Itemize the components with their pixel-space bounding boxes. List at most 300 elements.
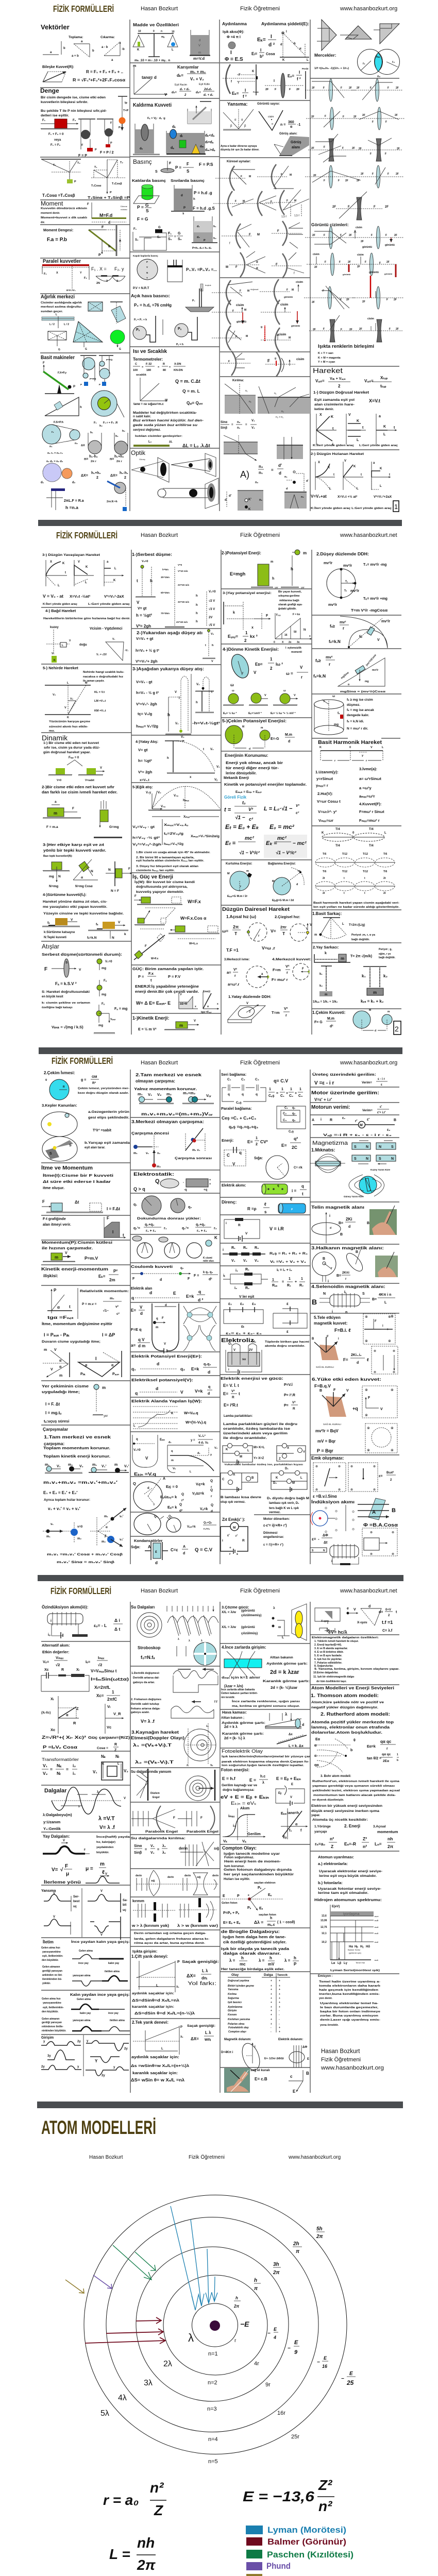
panel: özindüksiyon ve alternatif akım: Xc=	[96, 1693, 104, 1698]
panel: enerjinin korunumu: Enerji yok olmaz, ancak bir	[226, 761, 283, 765]
panel: lamba devreleri: C	[222, 1478, 225, 1481]
panel: yatay ve eğik atış: V₀	[158, 791, 161, 794]
panel: elektrostatik: nötr olur.	[203, 1260, 214, 1263]
panel: çarpışmalar: α	[106, 1526, 108, 1529]
panel: emk oluşması: Δt	[324, 1541, 328, 1545]
table: olay dalga tanecik: +	[279, 2026, 280, 2029]
panel: basit makineler: F.X=P.y	[58, 371, 66, 375]
panel: basit makineler: h₂-h₁	[120, 471, 128, 475]
panel: vektörler: a	[81, 40, 83, 43]
panel: girişim: y	[113, 2066, 115, 2069]
panel: kondansatör bağlama: Cₑş	[268, 1094, 275, 1098]
table: olay dalga tanecik: Işık basıncı	[228, 2001, 242, 2004]
panel: magnetik ve elektrik dolanım: E	[293, 2089, 296, 2094]
panel: basınç: F₁	[133, 228, 137, 231]
panel: enerjinin korunumu: Kinetik ve potansiyel enerjiler toplamıdır.	[224, 783, 307, 787]
panel: küresel aynalar: görüntü	[284, 296, 293, 298]
panel: atom modelleri ve enerji seviyeleri: Eₙ=-R	[344, 1841, 356, 1846]
panel: emk oluşması: Bωℓ²	[386, 1471, 394, 1475]
panel: düşey atışlar: 2-)Yukarıdan aşağı düşey atı	[137, 631, 203, 635]
panel: moment: F	[102, 226, 104, 229]
formula: enerji: Z²	[318, 2477, 332, 2493]
panel: madde ve özellikleri	[133, 22, 210, 62]
panel: fotoelektrik olay: i₀	[233, 1823, 235, 1828]
panel: aydınlanma: I	[271, 34, 272, 40]
panel: karışımlar: d₁ + d₂	[180, 88, 190, 91]
panel: coulomb ve elektrik alan: Vₛ L²	[198, 1434, 206, 1438]
panel: hareket: Vᵢₗₖ + Vₛₒₙ	[330, 377, 346, 381]
panel: küre elektrik alan ve potansiyel: Q₁+Q₂	[204, 1521, 212, 1524]
panel: ince zarlarda girişim: Aydınlık görme şartı:	[266, 1662, 308, 1666]
panel: ağırlık merkezi: G	[58, 348, 60, 351]
panel: viraj: mv²	[326, 655, 333, 659]
panel: düşey atışlar: V	[175, 691, 177, 694]
panel: viraj: r	[329, 662, 331, 667]
panel: atom modelleri ve enerji seviyeleri: şeklindeki tezini, elektron ışıma yapmadan açısal	[312, 1789, 400, 1792]
panel: düzgün dairesel hareket: F=m	[273, 968, 281, 972]
panel: su dalgalarında yansıma: Parabolik Engel	[187, 1830, 218, 1834]
panel: çarpışmalar: m₁	[104, 1515, 108, 1518]
panel: yansıma ve iletim: yansıyan atma	[73, 2019, 91, 2022]
panel: ısı ve sıcaklık: X-DN	[174, 363, 181, 366]
panel: itme ve momentum: Pᵢₗₖ	[80, 1372, 86, 1376]
panel: yatay ve eğik atış: hₘₐₓ=V₀ᵧ²/2g	[164, 842, 183, 846]
page 1 header: Hasan Bozkurt	[141, 6, 178, 12]
panel: düşey düzlemde ddh: mv²/r	[324, 562, 332, 565]
panel: aydınlanma: I	[286, 30, 287, 33]
panel: yay dalgaları	[43, 1834, 130, 1885]
panel: compton olayı: P=Pₛ + Pₑ	[223, 1911, 240, 1915]
panel: elektrostatik: +	[209, 1179, 211, 1182]
panel: atom modelleri ve enerji seviyeleri: b	[397, 1759, 398, 1762]
panel: lamba devreleri: D₂	[273, 1482, 277, 1485]
panel: aydınlanma: f ²	[243, 94, 247, 99]
orbit labels: n=3	[207, 2406, 217, 2412]
orbit labels: r	[234, 2338, 237, 2344]
panel: basit makineler: h₁	[115, 435, 119, 438]
panel: magnetik kuvvet: magnetik kuvvet:	[314, 1321, 347, 1326]
panel: kondansatör bağlama: C₂	[289, 1094, 293, 1098]
panel: su dalgaları: Etmesi(Doppler Olayı)	[131, 1736, 184, 1740]
panel: elektroliz: ile doğru orantılıdır.	[223, 1437, 267, 1440]
panel: emisyon: yon denir.	[319, 1997, 332, 2000]
panel: karışımlar: tanα= d	[142, 75, 157, 80]
panel: ısı ve sıcaklık: L₀	[148, 440, 152, 444]
panel: emisyon: tomda elektronların daha kararlı	[319, 1985, 381, 1988]
panel: mercekler: F	[385, 152, 386, 156]
panel: madde ve özellikleri: 10	[172, 30, 175, 33]
panel: hareket: K	[353, 465, 356, 468]
orbit labels: 4r	[254, 2361, 259, 2367]
panel: fotoelektrik olay: Akım	[240, 1806, 250, 1810]
panel: coulomb ve elektrik alan: V=k	[195, 1388, 203, 1394]
panel: düzgün dairesel hareket: V	[246, 1002, 248, 1005]
panel: hareket: V=V₀+at	[311, 494, 327, 499]
panel: atışlar	[42, 943, 127, 1034]
panel: çözme gücü: çözülmemiş)	[241, 1614, 261, 1617]
panel: coulomb ve elektrik alan: Coulomb kuvveti	[131, 1264, 173, 1269]
panel: çekim ivmesi ve kepler: g =	[81, 1078, 86, 1082]
panel: kırılma: V₂	[251, 427, 255, 430]
panel: küre elektrik alan ve potansiyel: Vₐ=k	[200, 1507, 208, 1511]
panel: fotoelektrik olay: E = h.f	[222, 1776, 235, 1781]
panel: çekim ivmesi ve kepler: T²/r³ =sabit	[93, 1129, 112, 1132]
panel: özindüksiyon ve alternatif akım: Vₗ	[107, 1704, 111, 1709]
panel: iş güç enerji: W= Δ E= Eₛₒₙ- E	[136, 1001, 171, 1006]
panel: coulomb ve elektrik alan: K	[171, 1412, 174, 1415]
panel: su dalgaları: λ₁	[187, 1764, 189, 1767]
panel: ışıkta girişim: Işıkta girişim:	[132, 1949, 157, 1954]
panel: lamba devreleri: M	[292, 1482, 295, 1485]
panel: kırılma: K′	[248, 498, 251, 501]
panel: fotoelektrik olay: parak elektron koparma olayına denir.Çarpan fo-	[222, 1760, 309, 1764]
panel: coulomb ve elektrik alan: q	[135, 1391, 138, 1396]
panel: çarpışmalar: Çarpışmalar	[43, 1427, 69, 1432]
panel: kondansatör bağlama: C₁	[227, 1078, 231, 1081]
chart: hidrojen enerji seviyeleri: Lyman Serisi(morötesi ışık)	[330, 1969, 380, 1972]
panel: düzgün dairesel hareket: 1.Açısal hız (ω)	[226, 914, 256, 919]
panel: potansiyel enerji: yer	[275, 586, 278, 589]
panel: coulomb ve elektrik alan: y =	[191, 1439, 195, 1442]
panel: hava kaması	[221, 1710, 307, 1748]
panel: fotoelektrik olay: Işık taneciklerinin(fotonların)metal bir yüzeye çar	[222, 1755, 311, 1758]
panel: de broglie: mV	[268, 1962, 275, 1967]
panel: yansıma ve iletim: eşit, iletileninkin-	[42, 1955, 63, 1958]
panel: iş güç enerji: W=F.x.Cos α	[180, 916, 207, 921]
panel: görüntü çizimleri: görüntü	[362, 246, 372, 249]
panel: kondansatör bağlama: q	[256, 1093, 258, 1096]
panel: ışıkta girişim: P	[180, 2026, 182, 2029]
panel: kırılma: n₂	[259, 464, 263, 469]
orbit labels: −E	[240, 2320, 249, 2328]
table: olay dalga tanecik: Birbiri içinden geçme	[228, 1985, 254, 1988]
panel: fotoelektrik olay: E	[291, 1783, 293, 1786]
panel: x ışını ve elektromagnetik dalgalar: t	[396, 1611, 397, 1614]
panel: devreler: R₁	[245, 1268, 249, 1272]
panel: basınç: S₁	[135, 239, 139, 242]
panel: paralel kuvvetler: R=F₁+F₂	[66, 289, 76, 292]
panel: mercekler: 1/f =(nₘ/n₀ -1)(1/r₁ + 1/r₂)	[314, 67, 349, 70]
panel: enerjinin korunumu: m	[298, 870, 300, 873]
panel: kondansatör bağlama: C₃	[255, 1078, 259, 1081]
panel: atom modelleri ve enerji seviyeleri: lanmış, elektronlar onun etrafında	[311, 1725, 390, 1730]
panel: emk oluşması: ⊗	[338, 1465, 341, 1468]
orbit labels: −	[317, 2360, 320, 2365]
panel: atom modelleri ve enerji seviyeleri: 3. Bohr atom modeli:	[321, 1775, 351, 1778]
panel: mercekler: F	[324, 146, 325, 149]
table: olay dalga tanecik: Girişim	[228, 2009, 237, 2012]
panel: devreler: Vₜ =V₁ + V₂ + V₃	[270, 1261, 306, 1264]
panel: emk oluşması: ⊙	[335, 1518, 338, 1521]
panel: küre elektrik alan ve potansiyel: Q	[181, 1493, 184, 1496]
panel: hareket: L:Geri yönde giden araç	[359, 444, 398, 447]
panel: ağırlık merkezi: Cisimler asıldığında ağırlık	[41, 301, 82, 304]
panel: özindüksiyon ve alternatif akım	[41, 1605, 130, 1752]
table: olay dalga tanecik: Aydınlanma	[227, 2006, 243, 2009]
orbit labels: 2λ	[163, 2360, 172, 2368]
panel: atışlar: V	[79, 968, 81, 972]
panel: basit makineler: h₁+h₂	[114, 455, 124, 459]
panel: coulomb ve elektrik alan: F =	[194, 1274, 199, 1278]
panel: kondansatör bağlama: q	[301, 1184, 304, 1189]
panel: görüntü çizimleri: Y + M = cyan	[318, 361, 335, 364]
panel: düşey atışlar: V	[211, 660, 213, 663]
panel: basınç: Pₓ = h	[176, 343, 183, 346]
panel: özindüksiyon ve alternatif akım: Alternatif akım:	[42, 1643, 70, 1648]
panel: küre elektrik alan ve potansiyel: Q₁	[154, 1515, 158, 1518]
panel: itme ve momentum: Δt süre etki ederse I kadar	[43, 1179, 111, 1184]
panel: iş güç enerji: GÜÇ: Birim zamanda yapılan iştir.	[132, 967, 204, 971]
panel: atom modelleri ve enerji seviyeleri: 2π	[388, 1844, 394, 1849]
panel: mercekler	[305, 49, 405, 220]
panel: düzgün dairesel hareket: V=ω .r	[262, 945, 276, 951]
panel: coulomb ve elektrik alan: q₂	[180, 1267, 184, 1270]
panel: kondansatör bağlama: q= C.V	[274, 1078, 288, 1083]
panel: ısı ve sıcaklık: Buz erirken hacmi küçülür. Isıl den-	[133, 419, 204, 422]
panel: yatay ve eğik atış: x=V₀.t	[140, 778, 149, 782]
panel: enerjinin korunumu: √1 − V²/c²	[276, 850, 297, 855]
panel: üreteç ve motor: ε - i r	[378, 1078, 385, 1081]
panel: görüntü çizimleri: F	[365, 261, 366, 264]
panel: basit makineler: F.S=P.h	[54, 421, 64, 424]
panel: düşey düzlemde ddh: T₀= mv²/r -mg	[363, 563, 386, 567]
panel: kaldırma kuvveti: Fₖ = Vᵦ · dₛ ·g	[147, 117, 165, 120]
panel: atom modelleri ve enerji seviyeleri: r	[386, 1747, 388, 1751]
panel: basit makineler: n=	[84, 457, 88, 461]
panel: serbest düşme: 1-)Serbest düşme:	[132, 552, 172, 557]
panel: lamba devreleri: D₁	[285, 1467, 289, 1470]
panel: özindüksiyon ve alternatif akım: 2πfC	[107, 1697, 117, 1702]
panel: de broglie: h	[269, 1956, 272, 1960]
panel: yansıma: Görüntü sayısı:	[257, 103, 280, 106]
panel: coulomb ve elektrik alan: q	[171, 1450, 173, 1453]
panel: su dalgalarında yansıma: Su dalgalarında yansım	[131, 1770, 171, 1774]
panel: çekim potansiyel enerjisi: d	[249, 748, 250, 751]
panel: hareket: V	[348, 413, 351, 417]
panel: iş güç enerji: 1-)Kinetik Enerji:	[132, 1015, 170, 1021]
panel: potansiyel enerji: E=mgh	[230, 571, 245, 577]
panel: üreteç ve motor: B	[394, 1118, 396, 1122]
panel: düşey atışlar: h	[196, 701, 198, 704]
panel: aydınlanma: I	[274, 79, 275, 83]
panel: ince zarlarda girişim: Alttan bakanın	[270, 1656, 293, 1659]
panel: magnetik kuvvet: ⊗	[367, 1427, 370, 1430]
panel: devreler: V₃	[255, 1259, 259, 1263]
panel: de broglie: dalga olarak davranır.	[223, 1952, 281, 1956]
panel: devreler: V	[245, 1232, 248, 1235]
panel: hareket: 2-) Düzgün Hızlanan Hareket	[311, 452, 364, 456]
panel: mercekler: F	[323, 87, 325, 90]
panel: düşey atışlar: V₀	[211, 633, 214, 636]
panel: görüntü çizimleri: görüntü	[369, 271, 379, 274]
panel: girişim: 2y	[77, 2040, 81, 2043]
panel: su dalgalarında kırılma: Derin ortamdan sığ ortama geçen dalga-	[134, 1932, 206, 1935]
panel: su dalgaları: f f	[214, 1701, 218, 1704]
panel: basit sarkaç: m	[341, 956, 344, 961]
panel: potansiyel enerji: miktarına bağlı	[279, 599, 299, 602]
orbit labels: 16	[322, 2364, 328, 2369]
panel: küresel aynalar: M	[294, 199, 296, 202]
panel: özindüksiyon ve alternatif akım: (Xₗ-Xc)	[41, 1711, 50, 1715]
panel: mercekler: 2F	[397, 147, 400, 150]
panel: magnetik kuvvet: ⊗	[365, 1388, 368, 1392]
panel: compton olayı: mₑ.c	[267, 1923, 275, 1927]
divider bar 5	[37, 2102, 403, 2108]
panel: serbest düşme: 7h=35m	[161, 612, 170, 615]
panel: elektroliz: Lamba parlaklıkları güçleri ile doğru	[223, 1423, 297, 1426]
panel: yansıma: düşmüş bir ışın 2α kadar döner.	[221, 148, 260, 151]
panel: magnetik kuvvet: B	[312, 1337, 314, 1341]
panel: kondansatör bağlama: q₂	[292, 1112, 296, 1115]
panel: su dalgaları: Derinlik artarsa dal-	[133, 1676, 160, 1680]
panel: su dalgaları: 1.Derinlik değişmesi:	[131, 1672, 160, 1675]
panel: görüntü çizimleri: cisim	[367, 317, 374, 320]
panel: küre elektrik alan ve potansiyel: d²	[179, 1509, 183, 1513]
panel: basit harmonik hareket: T/12	[342, 870, 347, 873]
orbit labels: π	[254, 2286, 258, 2292]
panel: kondansatör bağlama: C₂	[241, 1078, 245, 1081]
panel: viraj: fₛ=k.N	[329, 639, 341, 644]
panel: emisyon: yona örnektir.	[320, 2024, 339, 2027]
panel: aydınlanma: Cosα	[266, 53, 275, 56]
panel: magnetik kuvvet: B	[319, 1389, 322, 1393]
panel: emk oluşması: A	[372, 1510, 376, 1515]
panel: magnetik kuvvet: +q	[352, 1406, 358, 1411]
panel: basit makineler: d₂	[72, 481, 76, 484]
panel: itme ve momentum: uyguladığı itme;	[42, 1389, 80, 1394]
panel: merkezi çarpışma: Çarpışma sonrası	[175, 1157, 212, 1160]
panel: iş güç enerji: x	[217, 1003, 218, 1006]
panel: ışıkta girişim: Saçak genişliği:	[182, 1960, 219, 1964]
panel: basit makineler: n₂	[75, 442, 78, 445]
table: olay dalga tanecik: +	[271, 1997, 272, 2000]
panel: viraj: mg	[365, 680, 369, 683]
panel: düzgün dairesel hareket: ω=	[222, 928, 228, 934]
panel: düşey atışlar: V=V₀ - gt	[136, 680, 153, 684]
panel: küresel aynalar: F	[267, 359, 270, 363]
table: olay dalga tanecik: +	[271, 2018, 272, 2021]
panel: düşey atışlar: h	[167, 713, 170, 717]
panel: transformatörler: Nₗ	[115, 1754, 120, 1759]
panel: de broglie: Işığın hem dalga hem de tane-	[223, 1936, 287, 1939]
panel: su dalgalarında kırılma: w > λ (kırınım yok)	[131, 1924, 169, 1928]
panel: çözme gücü: λ	[273, 1606, 275, 1610]
panel: magnetik kuvvet: 5.Tele etkiyen	[314, 1315, 341, 1320]
panel: ince zarlarda girişim: İnce zarlarda alttan bakanla	[221, 1688, 255, 1691]
panel: magnetik kuvvet: i	[338, 1337, 339, 1341]
panel: potansiyel enerji: 1	[245, 631, 248, 635]
panel: hareket: 1	[394, 503, 398, 511]
page 4 header: www.hasanbozkurt.net	[340, 1588, 397, 1594]
panel: çarpışmalar: 1.Tam merkezi ve esnek	[44, 1434, 111, 1439]
panel: sürtünme kuvveti: 4-)Sürtünme kuvveti(fₛ):	[43, 892, 87, 897]
panel: silindir: mg	[334, 723, 339, 726]
page 2 header: www.hasanbozkurt.net	[340, 532, 397, 538]
panel: basit makineler: 2π r	[116, 460, 123, 463]
panel: kondansatör bağlama: Cₑş	[236, 1101, 242, 1105]
panel: küre elektrik alan ve potansiyel: Eᵧüzₑᵧ= k	[160, 1495, 177, 1499]
panel: transformatörler: L	[117, 1762, 120, 1766]
panel: lamba devreleri: K	[226, 1448, 228, 1451]
panel: küresel aynalar: M	[226, 266, 228, 269]
panel: lamba devreleri: r	[229, 1552, 231, 1556]
panel: emk oluşması: i	[331, 1560, 332, 1563]
panel: magnetizma: S	[354, 1157, 357, 1161]
panel: ışıkta girişim: ΔX=	[187, 1973, 196, 1978]
panel: basit harmonik hareket	[313, 740, 400, 909]
panel: sürtünme kuvveti	[42, 892, 128, 940]
panel: ince zarlarda girişim: 2d = k λzar	[270, 1669, 299, 1675]
panel: fotoelektrik olay: Foton enerjisi:	[221, 1768, 249, 1772]
panel: emk oluşması: ⊗	[392, 1531, 394, 1534]
panel: iş güç enerji: İş(W): Bir kuvvet bir cisme kendi	[134, 880, 195, 884]
panel: coulomb ve elektrik alan: d²	[209, 1278, 212, 1281]
table: olay dalga tanecik: -	[279, 2018, 280, 2021]
panel: küre elektrik alan ve potansiyel: A	[163, 1477, 165, 1481]
panel: ısı ve sıcaklık: F-32	[146, 363, 151, 366]
panel: madde ve özellikleri: n	[161, 30, 162, 33]
panel: silindir: fₛ = mg ise ancak	[347, 708, 374, 712]
panel: viraj: fₛ=k.N	[313, 673, 326, 679]
panel: enerjinin korunumu: − mc²	[293, 841, 307, 846]
panel: sürtünme kuvveti: k:Sürtünme katsayısı	[44, 931, 75, 934]
lyman arrows	[171, 2206, 217, 2310]
table: olay dalga tanecik: +	[279, 2006, 280, 2009]
panel: enerjinin korunumu: V²	[248, 807, 254, 812]
panel: özindüksiyon ve alternatif akım: Xc	[44, 1668, 49, 1672]
page 1 header	[53, 4, 397, 14]
panel: coulomb ve elektrik alan: Elektrik alan	[131, 1287, 152, 1291]
panel: emk oluşması: ⊗	[370, 1531, 373, 1534]
panel: mercekler: r₁	[363, 62, 365, 65]
panel: su dalgalarında kırılma: λ > w (kırınım var)	[177, 1924, 218, 1928]
panel: küresel aynalar: M	[289, 336, 291, 340]
panel: küresel aynalar: F	[281, 173, 282, 176]
panel: görüntü çizimleri: 2F	[396, 328, 399, 331]
panel: fotoelektrik olay: tanα=h	[287, 1811, 299, 1815]
panel: itme ve momentum: V	[54, 1348, 57, 1352]
panel: hareket: t	[361, 473, 362, 477]
panel: dinamik: F	[128, 867, 130, 871]
panel: yay dalgaları: V	[63, 1839, 65, 1842]
panel: de broglie: cik özelliği gösterdiğini söyler.	[223, 1941, 287, 1944]
panel: serbest düşme: 3h=15m	[161, 576, 170, 579]
panel: özindüksiyon ve alternatif akım: √2	[56, 1663, 60, 1667]
panel: enerjinin korunumu: Göreli Fizik	[224, 795, 247, 800]
panel: çekim kuvveti: d	[375, 1029, 376, 1032]
panel: su dalgaları: λ	[189, 1639, 190, 1642]
panel: x ışını ve elektromagnetik dalgalar	[312, 1605, 400, 1683]
panel: merkezi çarpışma: V₁	[148, 1092, 152, 1097]
panel: hareket: 1-) Düzgün Doğrusal Hareket	[313, 391, 369, 395]
panel: küresel aynalar: M	[290, 174, 292, 177]
panel: atışlar: Serbest düşme(sürtünmeli durum):	[42, 952, 122, 957]
panel: dinamik: Dinamik	[42, 734, 68, 742]
panel: basit harmonik hareket: V=ω√r²- y²	[318, 809, 337, 814]
panel: potansiyel enerji: 2x	[289, 641, 292, 644]
panel: denge: P	[119, 126, 121, 129]
panel: ısı ve sıcaklık: ΔL	[169, 440, 173, 444]
panel: çarpışmalar: v=0	[77, 1526, 83, 1529]
page 4 sheet	[41, 1586, 400, 2094]
panel: sürtünme kuvveti: fₛ=k.N	[87, 936, 97, 940]
panel: girişim: y	[77, 2065, 79, 2069]
panel: görüntü çizimleri: F	[340, 298, 342, 301]
panel: basit harmonik hareket: t	[344, 877, 345, 880]
panel: itme ve momentum	[41, 1164, 129, 1423]
panel: lamba devreleri: ters bağlı K ve L ışık	[269, 1507, 299, 1510]
panel: emk oluşması: ⊗	[315, 1488, 318, 1492]
